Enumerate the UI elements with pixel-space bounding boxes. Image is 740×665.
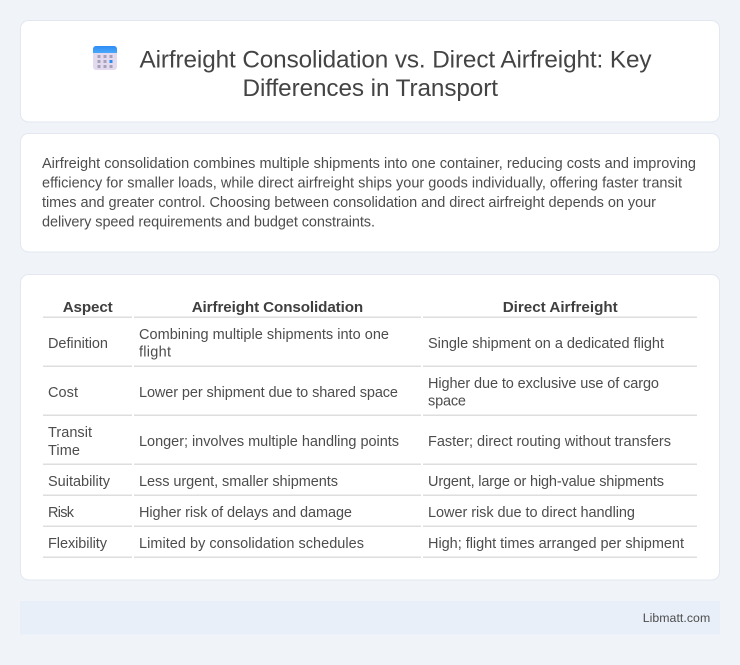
- row: definition: flight: [139, 344, 171, 360]
- panel: title card: [20, 20, 720, 122]
- row: risk: Risk: [48, 505, 75, 521]
- row: risk: [48, 505, 635, 521]
- table header: Aspect: [63, 299, 113, 316]
- row: suitability: Urgent, large or high-value shipments: [428, 474, 664, 490]
- row: flexibility: Flexibility: [48, 536, 108, 552]
- row: transit time: Longer; involves multiple handling points: [139, 434, 399, 450]
- row: transit time: Transit: [48, 425, 92, 441]
- row: cost: Cost: [48, 385, 78, 401]
- title: Airfreight Consolidation vs. Direct Airfreight: Key: [140, 46, 652, 74]
- row: definition: [48, 327, 664, 360]
- title: [140, 46, 652, 102]
- row: transit time: Time: [48, 443, 80, 459]
- icon: calendar: [93, 46, 117, 70]
- intro text: delivery speed requirements and budget constraints.: [42, 214, 375, 230]
- row: suitability: [48, 474, 664, 490]
- table header: [63, 299, 618, 316]
- table header: Airfreight Consolidation: [192, 299, 363, 316]
- row: flexibility: Limited by consolidation schedules: [139, 536, 364, 552]
- panel: comparison table: [20, 274, 720, 580]
- footer: Libmatt.com: [643, 611, 710, 625]
- row: definition: Single shipment on a dedicated flight: [428, 336, 664, 352]
- footer: [20, 601, 720, 634]
- row: cost: [48, 376, 659, 410]
- intro text: Airfreight consolidation combines multiple shipments into one container, reducing costs and improving: [42, 156, 696, 172]
- row: suitability: Suitability: [48, 474, 111, 490]
- row: transit time: [48, 425, 671, 459]
- table rules: [43, 316, 697, 558]
- row: flexibility: [48, 536, 684, 552]
- row: cost: space: [428, 394, 466, 410]
- row: risk: Lower risk due to direct handling: [428, 505, 635, 521]
- title: Differences in Transport: [242, 75, 498, 102]
- intro text: times and greater control. Choosing between consolidation and direct airfreight depends on your: [42, 195, 656, 211]
- intro text: efficiency for smaller loads, while direct airfreight ships your goods individually, offering faster transit: [42, 176, 682, 192]
- row: flexibility: High; flight times arranged per shipment: [428, 536, 684, 552]
- row: definition: Definition: [48, 336, 108, 352]
- row: definition: Combining multiple shipments into one: [139, 327, 389, 343]
- row: transit time: Faster; direct routing without transfers: [428, 434, 671, 450]
- row: suitability: Less urgent, smaller shipments: [139, 474, 338, 490]
- panel: intro: [20, 134, 720, 252]
- row: cost: Lower per shipment due to shared space: [139, 385, 398, 401]
- intro text: [42, 156, 696, 230]
- table header: Direct Airfreight: [503, 299, 618, 316]
- row: risk: Higher risk of delays and damage: [139, 505, 352, 521]
- row: cost: Higher due to exclusive use of cargo: [428, 376, 659, 392]
